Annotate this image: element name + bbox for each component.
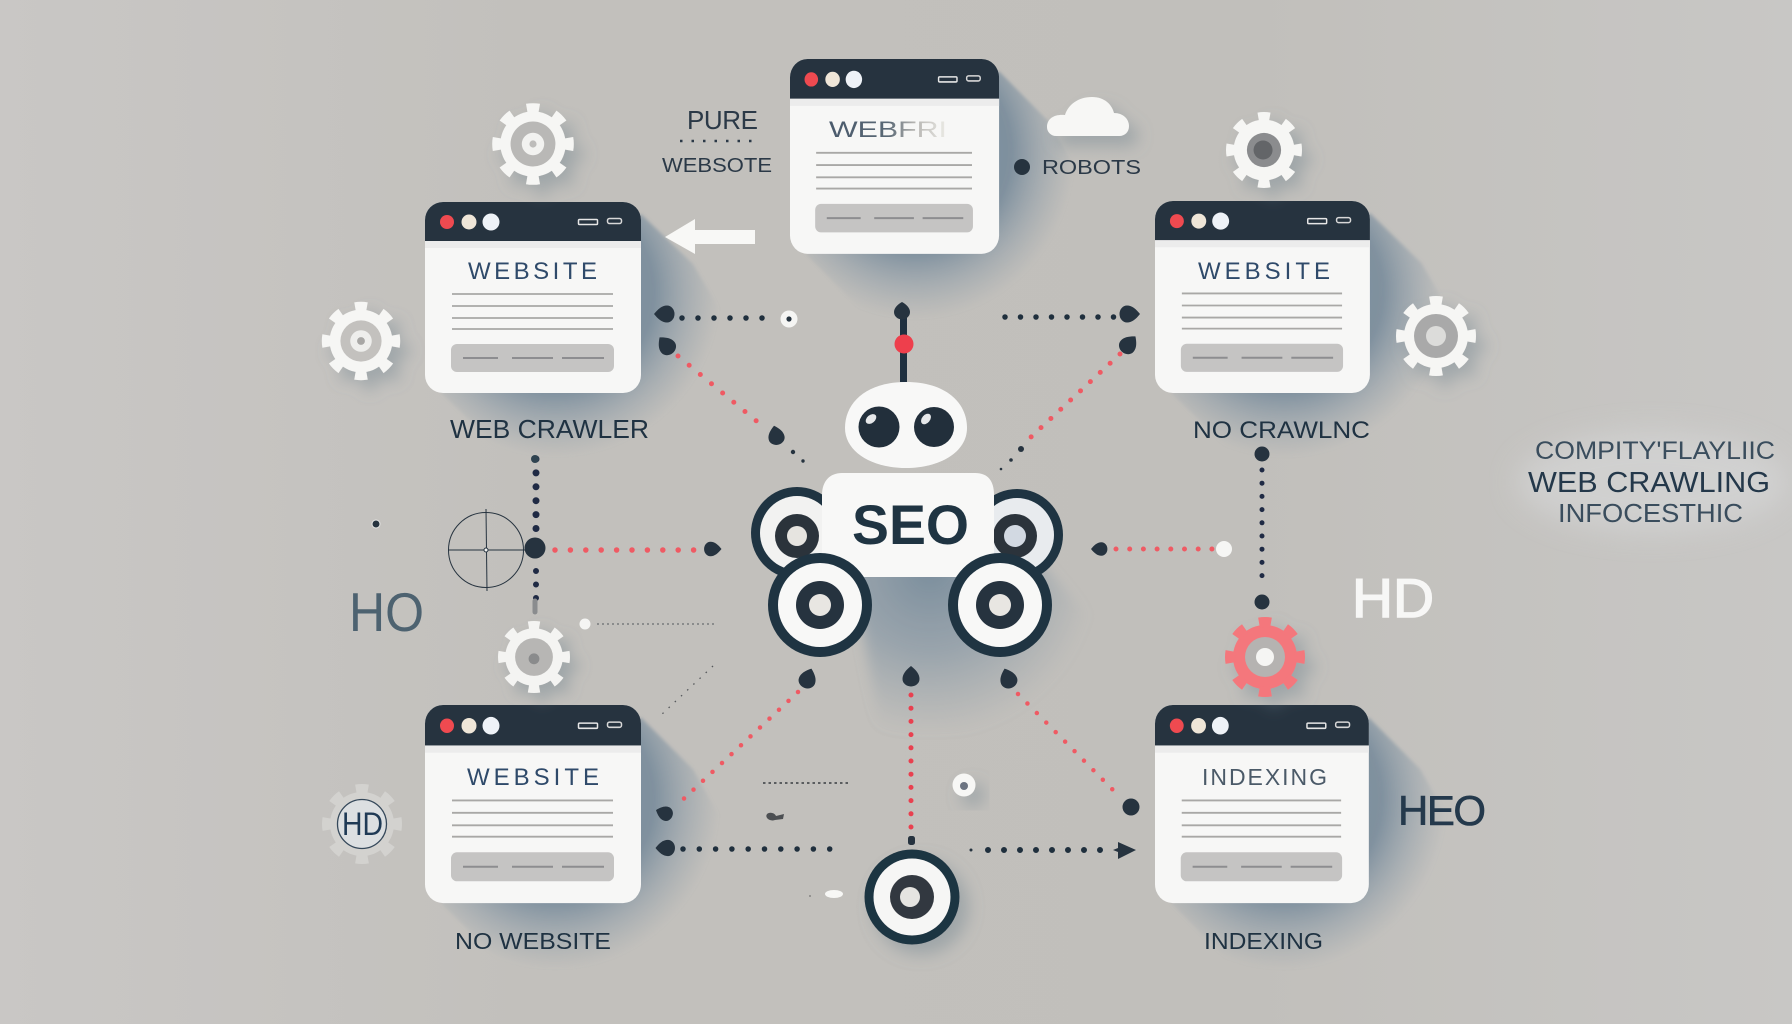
robot back wheels — [751, 487, 1063, 581]
label: HEO: HEO — [1398, 787, 1486, 834]
title block: web crawling infographic: WEB CRAWLING — [1528, 467, 1770, 499]
icon: salmon gear — [1230, 622, 1300, 692]
label: HD: HD — [1352, 567, 1434, 629]
white arrow — [665, 219, 755, 254]
small dark marker — [766, 813, 784, 820]
robot head — [845, 382, 967, 468]
robot body label: SEO: SEO — [852, 493, 969, 556]
dotted connector: top left to white node — [654, 306, 798, 328]
title block: web crawling infographic — [1517, 432, 1787, 532]
label: PURE WEBSOTE: WEBSOTE — [662, 155, 772, 177]
label: NO CRAWLNC: NO CRAWLNC — [1193, 417, 1370, 444]
robot body — [822, 473, 994, 577]
crosshair circle icon — [448, 509, 525, 591]
label: INDEXING: INDEXING — [1204, 928, 1323, 954]
label: PURE WEBSOTE — [662, 105, 772, 177]
red connector: robot to right node — [1091, 541, 1232, 557]
small dark dot — [372, 520, 380, 528]
red connector: bottom left — [654, 666, 819, 823]
label: PURE WEBSOTE: PURE — [687, 105, 758, 135]
robot — [751, 302, 1063, 657]
window title: WEBFRI: WEBFRI — [829, 117, 947, 142]
thin dotted line: bottom centre — [763, 782, 848, 784]
panel: indexing window — [1155, 705, 1454, 970]
icon: gear top left — [497, 108, 569, 180]
robot front wheels — [768, 553, 1052, 657]
icon: bottom wheel — [864, 850, 960, 944]
panel: top website window — [790, 59, 1082, 320]
panel: web crawler website window — [425, 202, 727, 458]
dotted connector: right vertical — [1254, 446, 1270, 610]
panel: no website window — [425, 705, 727, 970]
label: ROBOTS — [1014, 157, 1141, 179]
white small node — [952, 774, 976, 796]
dotted arrow: bottom right — [970, 842, 1136, 859]
icon: gear right — [1401, 301, 1471, 371]
icon: cloud — [1047, 97, 1129, 136]
dotted connector: to top right window — [1005, 306, 1140, 322]
icon: HD badge gear — [327, 789, 397, 859]
robot shadow — [850, 540, 1110, 730]
red connector: left node to robot — [524, 538, 722, 558]
robot antenna — [894, 302, 914, 382]
icon: gear left — [327, 307, 395, 375]
window title: INDEXING: INDEXING — [1202, 764, 1327, 790]
window title: WEBSITE: WEBSITE — [1198, 258, 1330, 285]
label: HO: HO — [349, 581, 424, 643]
red connector: bottom right — [997, 666, 1140, 816]
thin diagonal dotted line — [660, 666, 713, 716]
thin dotted line with white node — [580, 618, 716, 630]
red connector: top right window to robot — [1000, 331, 1142, 470]
title block: web crawling infographic: COMPITY'FLAYLIIC — [1535, 437, 1775, 465]
label: NO WEBSITE: NO WEBSITE — [455, 928, 611, 954]
window title: WEBSITE: WEBSITE — [467, 764, 599, 791]
window title: WEBSITE: WEBSITE — [468, 258, 597, 285]
icon: gear top right — [1231, 117, 1297, 183]
dotted vertical connector: left — [531, 455, 539, 612]
red connector: top left window to robot — [653, 332, 805, 463]
label: ROBOTS: ROBOTS — [1042, 157, 1141, 179]
icon: gear lower left — [502, 626, 566, 688]
panel: no crawling website window — [1155, 201, 1455, 458]
small white blob — [810, 890, 843, 898]
red connector: bottom middle — [902, 666, 920, 845]
label: WEB CRAWLER: WEB CRAWLER — [450, 414, 649, 444]
badge text: HD: HD — [342, 806, 383, 842]
title block: web crawling infographic: INFOCESTHIC — [1558, 498, 1743, 528]
dotted arrow: bottom left — [656, 840, 846, 856]
